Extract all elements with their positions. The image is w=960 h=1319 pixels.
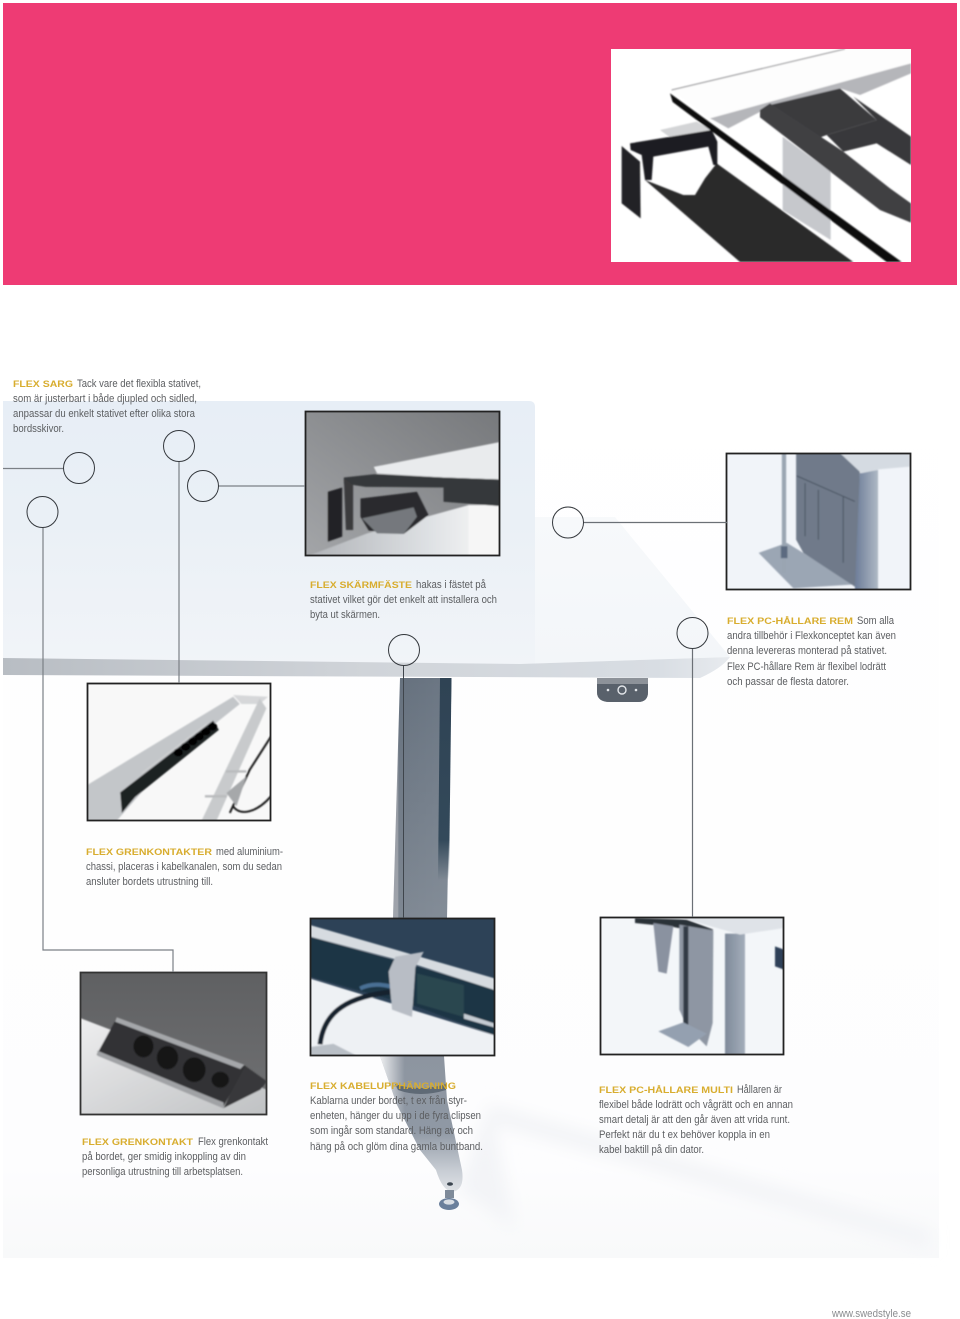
text: flex grenkontakt: Flex grenkontakt — [198, 1136, 268, 1148]
photo: screen bracket — [305, 411, 500, 556]
connector lines and markers — [3, 430, 727, 972]
text: flex grenkontakt: personliga utrustning till arbetsplatsen. — [82, 1166, 243, 1178]
text: flex kabelupphängning: Kablarna under bordet, t ex från styr- — [310, 1095, 467, 1107]
connector: flex pc-hållare rem — [552, 507, 727, 538]
text: flex pc-hållare multi — [599, 1084, 793, 1156]
text: flex grenkontakter: chassi, placeras i kabelkanalen, som du sedan — [86, 861, 282, 873]
photo: pc holder strap — [726, 453, 910, 590]
table foot — [439, 1190, 459, 1210]
text: flex sarg: Tack vare det flexibla stativet, — [77, 378, 201, 390]
text: flex sarg — [13, 378, 201, 435]
connector: flex sarg — [3, 452, 94, 484]
connector: flex grenkontakter — [164, 430, 194, 683]
text: flex pc-hållare rem: Flex PC-hållare Rem är flexibel lodrätt — [727, 661, 886, 673]
photo: pc holder multi — [600, 917, 784, 1055]
text: flex sarg: bordsskivor. — [13, 423, 64, 435]
table top surface — [520, 517, 730, 664]
text: flex skärmfäste — [310, 579, 497, 621]
text: flex pc-hållare rem: och passar de flesta datorer. — [727, 676, 849, 688]
text: flex grenkontakter: med aluminium- — [216, 846, 283, 858]
text: flex kabelupphängning: FLEX KABELUPPHÄNGNING — [310, 1081, 456, 1091]
text: flex kabelupphängning: som ingår som standard. Häng av och — [310, 1125, 473, 1137]
text: flex pc-hållare rem — [727, 615, 896, 688]
text: flex skärmfäste: hakas i fästet på — [416, 579, 486, 591]
text: flex pc-hållare multi: FLEX PC-HÅLLARE MULTI — [599, 1085, 733, 1095]
text: flex grenkontakter — [86, 846, 283, 888]
text: flex pc-hållare rem: FLEX PC-HÅLLARE REM — [727, 616, 853, 626]
photo: power strip in cable channel — [87, 683, 271, 821]
text: flex pc-hållare multi: Perfekt när du t ex behöver koppla in en — [599, 1129, 770, 1141]
text: flex skärmfäste: byta ut skärmen. — [310, 609, 380, 621]
text: flex kabelupphängning: enheten, hänger du upp i de fyra clipsen — [310, 1110, 481, 1122]
page background — [3, 340, 939, 1258]
screen panel — [3, 401, 535, 664]
connector: flex pc-hållare multi — [677, 618, 708, 917]
text: flex skärmfäste: stativet vilket gör det enkelt att installera och — [310, 594, 497, 606]
control box — [597, 678, 648, 702]
table edge — [3, 657, 730, 678]
connector: flex grenkontakt — [27, 496, 173, 972]
connector: flex skärmfäste — [188, 470, 305, 502]
header banner — [3, 3, 957, 285]
text: flex kabelupphängning: häng på och glöm dina gamla buntband. — [310, 1141, 483, 1153]
text: flex pc-hållare multi: Hållaren är — [737, 1084, 782, 1096]
header photo: table frame with cable tray — [611, 49, 911, 262]
table scene — [3, 401, 730, 1210]
connector: flex kabelupphängning — [388, 634, 420, 918]
text: flex sarg: som är justerbart i både djupled och sidled, — [13, 393, 197, 405]
photo: cable clip — [310, 918, 495, 1056]
floor shadows — [458, 1100, 930, 1250]
text: flex pc-hållare multi: flexibel både lodrätt och vågrätt och en annan — [599, 1099, 793, 1111]
text: flex grenkontakt: FLEX GRENKONTAKT — [82, 1137, 194, 1147]
text: flex grenkontakt: på bordet, ger smidig inkoppling av din — [82, 1151, 246, 1163]
text: flex sarg: anpassar du enkelt stativet efter olika stora — [13, 408, 195, 420]
text: flex sarg: FLEX SARG — [13, 379, 73, 389]
text: flex pc-hållare multi: kabel baktill på din dator. — [599, 1144, 704, 1156]
table leg — [380, 678, 463, 1192]
text: flex grenkontakter: ansluter bordets utrustning till. — [86, 876, 213, 888]
text: flex grenkontakter: FLEX GRENKONTAKTER — [86, 847, 213, 857]
text: flex skärmfäste: FLEX SKÄRMFÄSTE — [310, 580, 412, 590]
text: flex kabelupphängning — [310, 1081, 483, 1153]
text: flex pc-hållare multi: smart detalj är att den går även att vrida runt. — [599, 1114, 790, 1126]
text: flex pc-hållare rem: andra tillbehör i Flexkonceptet kan även — [727, 630, 896, 642]
text: flex pc-hållare rem: denna levereras monterad på stativet. — [727, 645, 887, 657]
photo: desktop outlet — [80, 972, 267, 1115]
text: flex grenkontakt — [82, 1136, 268, 1178]
text: flex pc-hållare rem: Som alla — [857, 615, 894, 627]
